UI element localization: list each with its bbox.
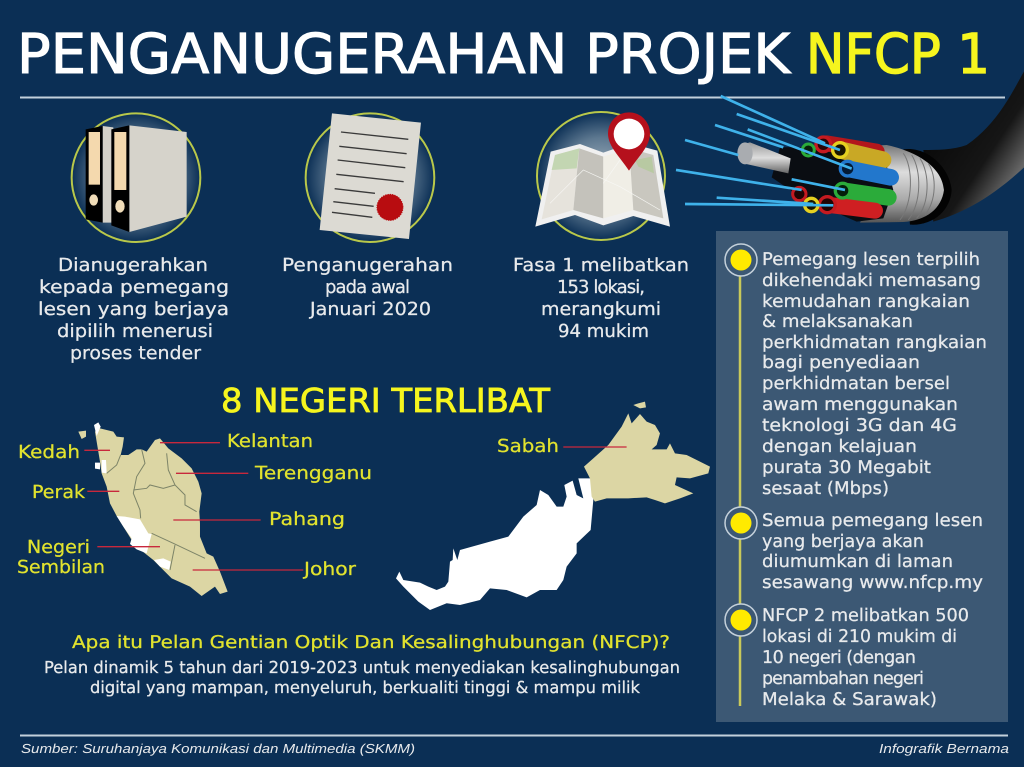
text: tender awarded: [38, 255, 229, 364]
NFCP description: Pelan dinamik 5 tahun dari 2019-2023 untuk menyediakan kesalinghubungan: [44, 658, 680, 677]
note: licence requirements: perkhidmatan rangkaian: [762, 333, 987, 353]
text: tender awarded: kepada pemegang: [39, 277, 229, 298]
question heading: Apa itu Pelan Gentian Optik Dan Kesalinghubungan (NFCP)?: [72, 633, 670, 653]
note: winners announced: Semua pemegang lesen: [762, 511, 983, 531]
text: phase 1 scope: Fasa 1 melibatkan: [513, 255, 689, 276]
note: NFCP 2: Melaka & Sarawak): [762, 690, 937, 710]
title: PENGANUGERAHAN PROJEK: [17, 22, 792, 86]
note: winners announced: yang berjaya akan: [762, 532, 924, 552]
note: licence requirements: Pemegang lesen terpilih: [762, 250, 980, 270]
note: licence requirements: dikehendaki memasang: [762, 271, 981, 291]
note: licence requirements: & melaksanakan: [762, 312, 913, 332]
icon: certificate: [306, 113, 434, 242]
panel: licence notes: [716, 231, 1008, 722]
text: award date: [282, 255, 453, 320]
agency credit: Infografik Bernama: [879, 741, 1009, 756]
note: licence requirements: awam menggunakan: [762, 395, 958, 415]
NFCP description: [44, 658, 680, 697]
note: winners announced: sesawang www.nfcp.my: [762, 573, 983, 593]
note: licence requirements: sesaat (Mbps): [762, 479, 889, 499]
note: licence requirements: [762, 250, 987, 499]
map: Peninsular Malaysia: [78, 422, 228, 596]
state labels: Johor: [303, 559, 357, 580]
state labels: Negeri: [27, 537, 90, 558]
text: award date: pada awal: [325, 277, 410, 298]
note: licence requirements: purata 30 Megabit: [762, 458, 931, 478]
state leader lines: [84, 443, 627, 570]
state labels: Pahang: [269, 509, 345, 530]
timeline: [725, 244, 757, 706]
note: licence requirements: perkhidmatan bersel: [762, 374, 950, 394]
state labels: Terengganu: [254, 463, 372, 484]
NFCP description: digital yang mampan, menyeluruh, berkualiti tinggi & mampu milik: [90, 678, 640, 697]
source credit: Sumber: Suruhanjaya Komunikasi dan Multimedia (SKMM): [21, 741, 415, 756]
heading: 8 states: 8 NEGERI TERLIBAT: [221, 381, 551, 420]
text: award date: Januari 2020: [309, 299, 431, 320]
note: licence requirements: bagi penyediaan: [762, 353, 920, 373]
note: NFCP 2: [762, 606, 969, 710]
note: NFCP 2: penambahan negeri: [762, 669, 924, 689]
text: tender awarded: dipilih menerusi: [57, 321, 213, 342]
text: award date: Penganugerahan: [282, 255, 453, 276]
note: licence requirements: teknologi 3G dan 4G: [762, 416, 957, 436]
map: East Malaysia: [396, 402, 710, 610]
text: phase 1 scope: 153 lokasi,: [557, 277, 645, 298]
icon: fibre optic cable: [676, 67, 1024, 225]
note: winners announced: [762, 511, 983, 593]
note: NFCP 2: lokasi di 210 mukim di: [762, 627, 957, 647]
state labels: Sabah: [497, 436, 559, 457]
icon: map with pin: [535, 112, 670, 240]
icon: binders: [72, 113, 200, 242]
state labels: [17, 431, 559, 580]
note: winners announced: diumumkan di laman: [762, 552, 953, 572]
state labels: Kedah: [18, 442, 80, 463]
note: licence requirements: dengan kelajuan: [762, 437, 917, 457]
text: tender awarded: lesen yang berjaya: [38, 299, 229, 320]
note: licence requirements: kemudahan rangkaian: [762, 292, 970, 312]
state labels: Kelantan: [227, 431, 313, 452]
text: tender awarded: proses tender: [70, 343, 202, 364]
note: NFCP 2: 10 negeri (dengan: [762, 648, 916, 668]
text: phase 1 scope: [513, 255, 689, 342]
state labels: Sembilan: [17, 557, 105, 578]
text: phase 1 scope: merangkumi: [541, 299, 661, 320]
text: tender awarded: Dianugerahkan: [58, 255, 208, 276]
state labels: Perak: [32, 482, 86, 503]
title: NFCP 1: [806, 22, 990, 86]
note: NFCP 2: NFCP 2 melibatkan 500: [762, 606, 969, 626]
text: phase 1 scope: 94 mukim: [558, 321, 649, 342]
